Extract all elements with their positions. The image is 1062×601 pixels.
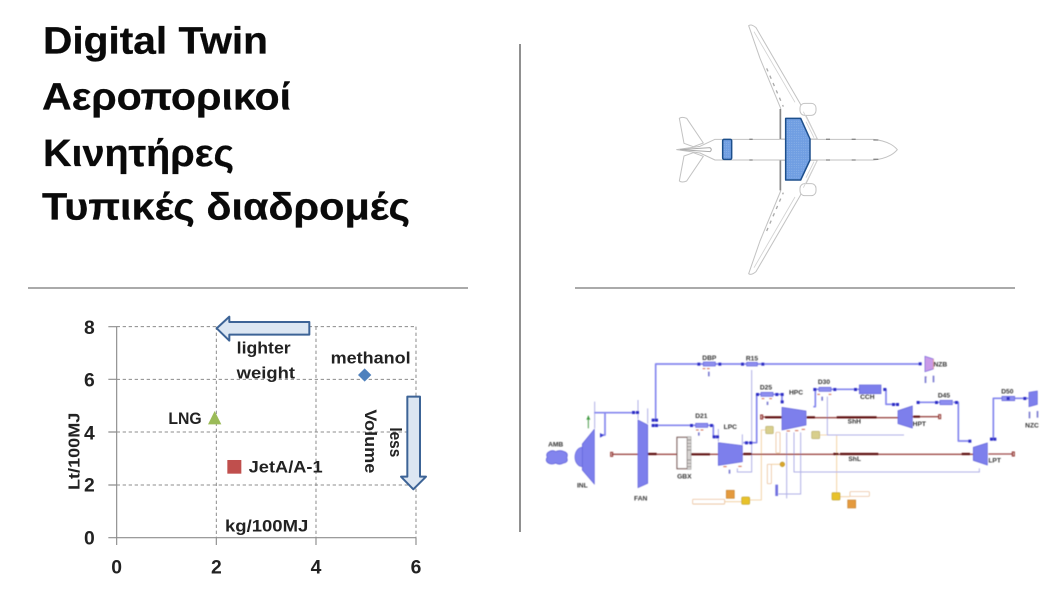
title: Digital Twin <box>43 20 268 62</box>
volume label: Volume <box>361 409 380 473</box>
y axis numbers: 8 <box>84 318 95 339</box>
spools and shafts <box>612 417 1013 454</box>
CCH combustion chamber: CCH <box>860 394 875 401</box>
title: Αεροπορικοί <box>42 76 291 118</box>
control signal lines <box>725 430 850 502</box>
LPT low pressure turbine <box>973 443 1001 465</box>
D30 duct: D30 <box>818 379 830 386</box>
NZC core nozzle: NZC <box>1025 422 1039 429</box>
methanol label: methanol <box>331 348 411 367</box>
CCH combustion chamber <box>859 385 881 401</box>
sensor return lines <box>595 370 979 498</box>
pipe connector nodes <box>632 362 1026 444</box>
D21 duct: D21 <box>695 413 708 420</box>
R15 duct: R15 <box>746 355 758 362</box>
GBX gearbox: GBX <box>677 473 692 480</box>
HPC high pressure compressor <box>782 390 806 430</box>
D50 duct: D50 <box>1001 389 1014 396</box>
x axis numbers: 4 <box>311 557 322 578</box>
LNG label: LNG <box>168 409 202 428</box>
NZB bypass nozzle: NZB <box>933 362 947 369</box>
engine system schematic <box>546 355 1039 508</box>
D21 duct <box>695 413 708 427</box>
ShH shaft label: ShH <box>848 419 861 426</box>
INL inlet: INL <box>577 483 588 490</box>
schedule and control blocks <box>693 426 869 508</box>
FAN <box>634 420 648 502</box>
AMB ambient cloud <box>546 441 567 464</box>
chart axes <box>108 327 416 545</box>
y axis numbers: 2 <box>84 476 95 497</box>
DBP duct <box>702 355 717 366</box>
fuel comparison scatter chart <box>66 317 426 578</box>
y axis numbers: 0 <box>84 528 95 549</box>
title <box>42 20 410 228</box>
FAN: FAN <box>634 495 648 502</box>
title: Κινητήρες <box>43 133 234 175</box>
less volume arrow <box>401 397 426 489</box>
LPC low pressure compressor: LPC <box>724 424 737 431</box>
lighter weight label: lighter <box>237 338 291 357</box>
y axis numbers <box>84 318 95 549</box>
lighter weight label <box>236 338 295 382</box>
DBP duct: DBP <box>702 355 717 362</box>
lighter weight label: weight <box>236 363 295 382</box>
lower engine nacelle <box>800 184 816 196</box>
HPT high pressure turbine: HPT <box>913 421 926 428</box>
sensor markers <box>696 369 927 467</box>
JetA/A-1 point <box>227 460 241 474</box>
D30 duct <box>818 379 831 391</box>
flow pipes <box>594 364 1028 443</box>
ShL shaft label: ShL <box>848 456 861 463</box>
wing centre fuel tank <box>786 118 810 180</box>
x axis numbers: 0 <box>111 557 122 578</box>
LNG point <box>208 411 221 424</box>
x axis numbers <box>111 557 422 578</box>
aircraft top view with fuel tanks <box>677 25 897 274</box>
upper engine nacelle <box>800 103 816 115</box>
x axis numbers: 2 <box>211 557 222 578</box>
INL inlet <box>575 416 604 490</box>
less label: less <box>386 427 405 457</box>
lighter weight arrow <box>217 317 309 341</box>
methanol point <box>358 368 371 382</box>
HPT high pressure turbine <box>898 406 926 428</box>
title: Τυπικές διαδρομές <box>42 186 410 228</box>
LPC low pressure compressor <box>718 424 742 465</box>
NZC core nozzle <box>1025 391 1039 429</box>
shaft end caps <box>611 415 1014 456</box>
lower tailplane <box>679 153 703 182</box>
D25 duct: D25 <box>760 385 772 392</box>
D50 duct <box>1001 389 1015 401</box>
lower wing <box>749 160 817 274</box>
y axis title: Lt/100MJ <box>66 413 83 490</box>
NZB bypass nozzle <box>925 356 947 372</box>
y axis numbers: 6 <box>84 371 95 392</box>
R15 duct <box>746 355 758 366</box>
HPC high pressure compressor: HPC <box>789 390 803 397</box>
fuselage <box>677 139 897 160</box>
x axis numbers: 6 <box>411 557 422 578</box>
D25 duct <box>760 385 773 396</box>
D45 duct: D45 <box>938 392 950 399</box>
GBX gearbox <box>677 437 692 480</box>
JetA/A-1 label: JetA/A-1 <box>249 458 323 477</box>
y axis numbers: 4 <box>84 423 95 444</box>
rear fuel tank <box>723 139 732 159</box>
upper tailplane <box>679 117 703 147</box>
D45 duct <box>938 392 952 405</box>
LPT low pressure turbine: LPT <box>988 458 1001 465</box>
x axis title: kg/100MJ <box>225 517 308 536</box>
AMB ambient cloud: AMB <box>548 441 563 448</box>
upper wing <box>749 25 817 139</box>
